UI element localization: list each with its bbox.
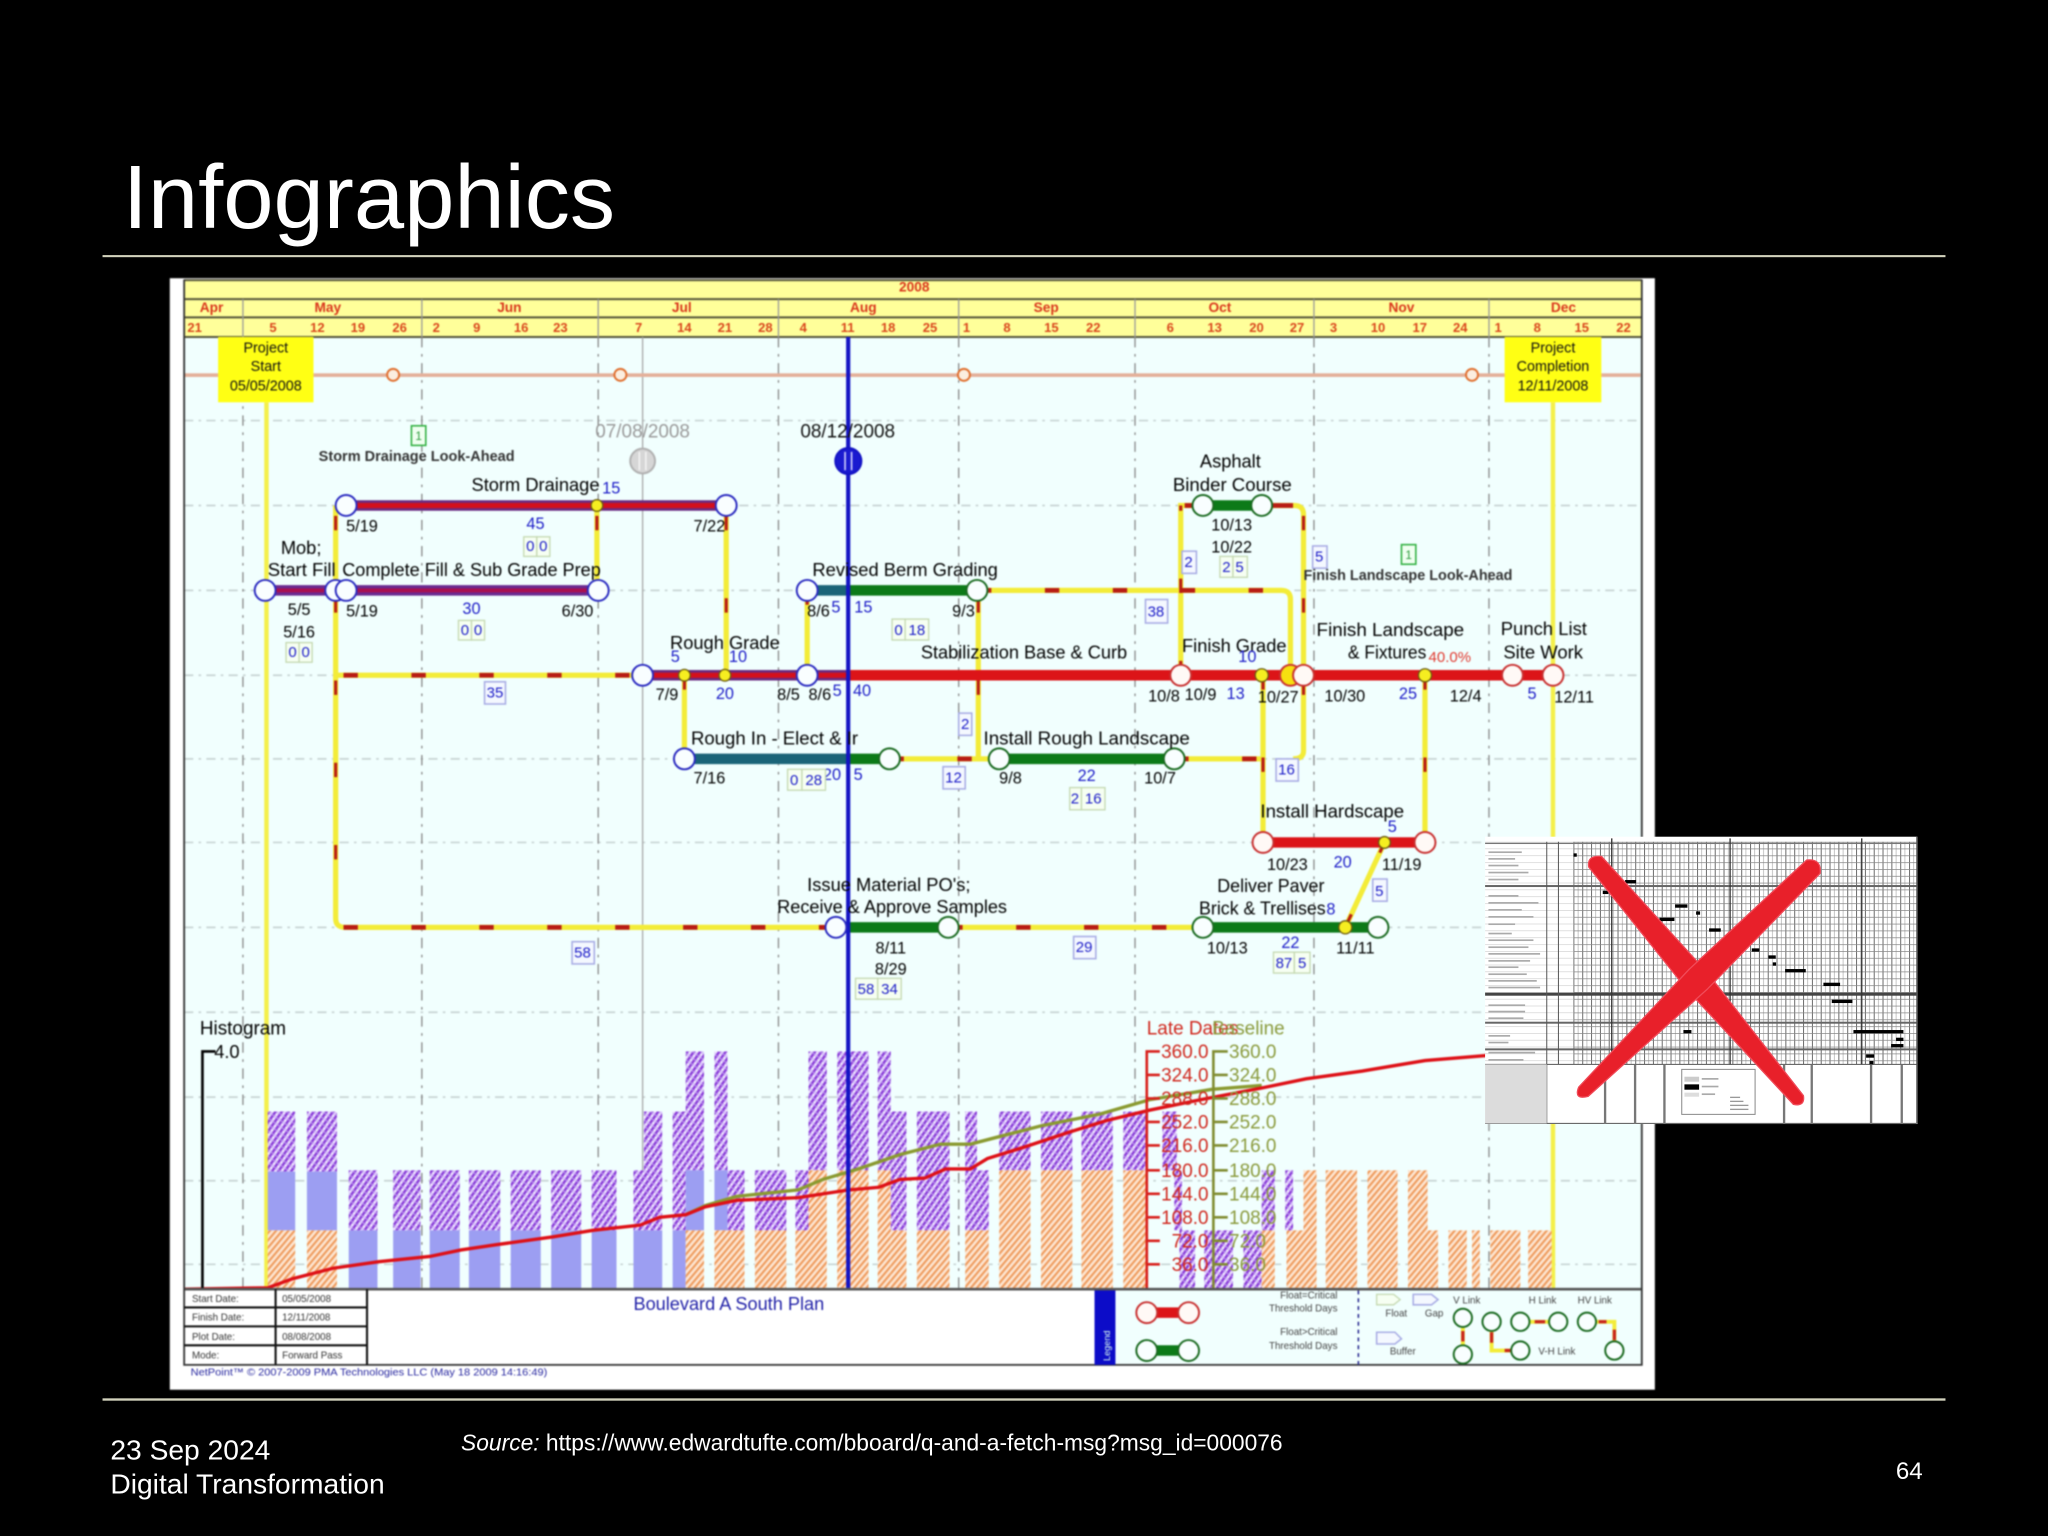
activity durations: 25 xyxy=(1399,685,1417,703)
float boxes: 34 xyxy=(881,981,898,998)
timeline header: 19 xyxy=(351,320,365,335)
activity durations: 20 xyxy=(716,685,734,703)
legend: critical and non-critical bars: Threshold Days xyxy=(1269,1341,1338,1352)
activity durations: 20 xyxy=(1334,853,1352,871)
S-curve: late dates xyxy=(184,1055,1489,1289)
activity labels: Start Fill xyxy=(268,559,336,580)
project info table xyxy=(184,1289,367,1365)
project info table: Forward Pass xyxy=(282,1350,343,1361)
activity dates: 10/30 xyxy=(1324,687,1365,705)
activity dates: 7/9 xyxy=(656,686,678,704)
gantt footer and legend xyxy=(1485,1064,1902,1123)
activity durations: 5 xyxy=(671,648,680,666)
float boxes: 0 xyxy=(894,622,903,639)
timeline header: 21 xyxy=(187,320,202,335)
float boxes: 0 xyxy=(461,622,469,639)
project info table: 08/08/2008 xyxy=(282,1332,332,1343)
baseline axis: 144.0 xyxy=(1229,1184,1276,1205)
activity labels: Storm Drainage Look-Ahead xyxy=(319,449,515,465)
source citation: Source: https://www.edwardtufte.com/bboard/q-and-a-fetch-msg?msg_id=000076 xyxy=(461,1429,1283,1455)
data date markers xyxy=(595,422,895,474)
activity durations: 45 xyxy=(526,515,545,533)
activity labels: Stabilization Base & Curb xyxy=(921,641,1127,662)
activity labels: Binder Course xyxy=(1173,474,1292,495)
activity labels: Rough Grade xyxy=(670,632,780,653)
legend: critical and non-critical bars: Float>Critical xyxy=(1280,1327,1337,1338)
late dates axis: 144.0 xyxy=(1161,1184,1209,1205)
activity labels: & Fixtures xyxy=(1348,641,1426,662)
late dates axis: 288.0 xyxy=(1161,1089,1209,1110)
project info table: Finish Date: xyxy=(192,1312,244,1323)
timeline header: 16 xyxy=(514,320,528,335)
timeline header: 15 xyxy=(1044,320,1059,335)
legend: float, gap and buffer: Float xyxy=(1385,1309,1407,1320)
activity dates: 5/19 xyxy=(346,602,378,620)
legend: critical and non-critical bars: Float=Critical xyxy=(1280,1290,1337,1301)
timeline header: 2008 xyxy=(899,279,930,294)
activity dates: 8/5 xyxy=(777,686,800,704)
late dates axis: 360.0 xyxy=(1161,1042,1209,1063)
float boxes: 58 xyxy=(858,981,874,998)
legend: link types xyxy=(1453,1296,1624,1364)
activity dates: 9/3 xyxy=(952,602,975,620)
activity durations: 13 xyxy=(1227,685,1245,703)
legend tab xyxy=(1095,1290,1115,1365)
activity dates xyxy=(283,516,1594,978)
legend: critical and non-critical bars: Threshold Days xyxy=(1269,1303,1338,1314)
activity dates: 7/22 xyxy=(694,518,725,536)
timeline header: 1 xyxy=(963,320,970,335)
legend: critical and non-critical bars xyxy=(1136,1290,1358,1365)
gap boxes: 2 xyxy=(961,716,969,733)
late dates axis: 180.0 xyxy=(1161,1161,1209,1182)
data date markers: 08/12/2008 xyxy=(800,422,895,443)
baseline axis: 108.0 xyxy=(1229,1208,1276,1229)
timeline header: 15 xyxy=(1574,320,1589,335)
activity dates: 10/23 xyxy=(1267,856,1308,874)
timeline header: Aug xyxy=(850,300,877,315)
activity dates: 10/9 xyxy=(1185,686,1216,704)
activity labels: Finish Landscape Look-Ahead xyxy=(1304,568,1512,584)
late dates axis: 72.0 xyxy=(1172,1231,1208,1252)
copyright line: NetPoint™ © 2007-2009 PMA Technologies LLC (May 18 2009 14:16:49) xyxy=(191,1367,547,1378)
timeline header: Jun xyxy=(497,300,522,315)
float boxes: 28 xyxy=(805,772,822,789)
timeline header: 18 xyxy=(881,320,895,335)
activity dates: 10/22 xyxy=(1211,538,1252,556)
activity dates: 5/5 xyxy=(288,601,310,619)
float boxes: 0 xyxy=(790,772,798,789)
activity labels: Deliver Paver xyxy=(1217,875,1324,896)
timeline header: 28 xyxy=(758,320,773,335)
float boxes: 0 xyxy=(526,538,534,555)
gap boxes: 58 xyxy=(574,944,591,961)
timeline header: 2 xyxy=(433,320,440,335)
baseline axis xyxy=(1212,1018,1285,1289)
float boxes: 2 xyxy=(1222,559,1231,576)
timeline header: Jul xyxy=(672,300,692,315)
baseline axis: 252.0 xyxy=(1229,1112,1276,1133)
gap boxes: 2 xyxy=(1184,554,1193,571)
activity durations: 5 xyxy=(854,766,863,784)
timeline header xyxy=(184,279,1642,337)
page number: 64 xyxy=(1896,1458,1923,1485)
timeline header: 22 xyxy=(1616,320,1631,335)
footer date and course xyxy=(110,1434,385,1500)
look-ahead flags: 1 xyxy=(1405,549,1412,562)
timeline header: 7 xyxy=(635,320,642,335)
activity dates: 7/16 xyxy=(694,770,725,788)
activity labels: Finish Grade xyxy=(1182,635,1287,656)
timeline header: 9 xyxy=(473,320,480,335)
look-ahead flags xyxy=(411,426,1416,564)
timeline header: 8 xyxy=(1534,320,1541,335)
activity labels: Issue Material PO's; xyxy=(807,874,970,895)
timeline header: 1 xyxy=(1494,320,1502,335)
activity durations: 40 xyxy=(853,682,871,700)
red X xyxy=(1577,856,1820,1105)
activity durations xyxy=(462,480,1537,952)
float boxes: 5 xyxy=(1298,955,1306,972)
activity dates: 8/6 xyxy=(807,602,830,620)
activity dates: 8/11 xyxy=(876,939,906,957)
activity durations: 15 xyxy=(854,599,872,617)
timeline header: Oct xyxy=(1208,300,1232,315)
timeline header: 10 xyxy=(1371,320,1385,335)
histogram axis: Histogram xyxy=(200,1018,286,1039)
project info table: Mode: xyxy=(192,1350,219,1361)
late dates axis: 216.0 xyxy=(1161,1136,1209,1157)
milestone: project start: 05/05/2008 xyxy=(230,379,302,395)
float boxes: 0 xyxy=(539,538,548,555)
baseline axis: 36.0 xyxy=(1229,1255,1266,1276)
activity labels: Receive & Approve Samples xyxy=(777,896,1007,917)
timeline header: 5 xyxy=(269,320,277,335)
project info table: 12/11/2008 xyxy=(282,1312,331,1323)
legend: link types: HV Link xyxy=(1578,1296,1612,1307)
activity dates: 11/11 xyxy=(1336,939,1375,957)
project info table: Start Date: xyxy=(192,1294,239,1305)
timeline header: 23 xyxy=(553,320,568,335)
calendar milestone line xyxy=(184,369,1640,381)
gantt task column xyxy=(1488,851,1540,1061)
project name: Boulevard A South Plan xyxy=(633,1293,824,1314)
late dates axis xyxy=(1147,1018,1238,1289)
timeline header: 6 xyxy=(1167,320,1174,335)
activity labels: Rough In - Elect & Ir xyxy=(691,727,858,748)
legend: float, gap and buffer: Gap xyxy=(1425,1309,1444,1320)
activity dates: 12/4 xyxy=(1450,687,1482,705)
timeline header: 20 xyxy=(1249,320,1264,335)
activity bars xyxy=(265,505,1553,927)
milestone: project start xyxy=(218,337,313,402)
activity durations: 5 xyxy=(1528,685,1537,703)
activity dates: 5/16 xyxy=(283,623,315,641)
gap boxes: 29 xyxy=(1076,939,1092,956)
timeline header: Nov xyxy=(1389,300,1415,315)
gantt task bars xyxy=(1573,853,1903,1064)
activity durations: 5 xyxy=(831,599,840,617)
activity dates: 11/19 xyxy=(1382,856,1422,874)
activity labels: Asphalt xyxy=(1200,451,1261,472)
S-curve: baseline xyxy=(686,1085,1262,1215)
timeline header: 24 xyxy=(1453,320,1468,335)
float boxes xyxy=(286,537,1310,999)
baseline axis: 180.0 xyxy=(1229,1161,1276,1182)
milestone: project completion: 12/11/2008 xyxy=(1518,379,1588,395)
footer date and course: 23 Sep 2024 xyxy=(110,1434,270,1466)
gap boxes: 35 xyxy=(487,684,503,701)
gap boxes: 38 xyxy=(1148,603,1164,620)
late dates axis: 108.0 xyxy=(1161,1208,1209,1229)
activity labels: Storm Drainage xyxy=(472,474,600,495)
activity labels: Site Work xyxy=(1503,641,1584,662)
timeline header: May xyxy=(315,300,342,315)
timeline header: Sep xyxy=(1034,300,1059,315)
project info table: Plot Date: xyxy=(192,1332,235,1343)
milestone: project completion: Project xyxy=(1531,341,1575,357)
gantt grid xyxy=(1485,837,1917,1123)
timeline header: 21 xyxy=(718,320,732,335)
activity dates: 10/13 xyxy=(1207,939,1248,957)
gap boxes: 5 xyxy=(1315,549,1323,566)
float boxes: 5 xyxy=(1235,559,1244,576)
timeline header: 14 xyxy=(677,320,692,335)
baseline axis: 72.0 xyxy=(1229,1231,1266,1252)
title block xyxy=(184,280,1642,1365)
activity dates: 10/13 xyxy=(1211,516,1252,534)
legend: link types: V Link xyxy=(1453,1296,1480,1307)
timeline header: 27 xyxy=(1290,320,1304,335)
float boxes: 16 xyxy=(1085,790,1102,807)
activity dates: 10/27 xyxy=(1258,689,1299,707)
gap boxes: 12 xyxy=(945,769,962,786)
late dates axis: 36.0 xyxy=(1172,1255,1208,1276)
panel: network schedule chart xyxy=(170,278,1655,1390)
milestone: project start: Project xyxy=(243,341,288,357)
activity durations: 5 xyxy=(1388,818,1397,836)
top rule xyxy=(103,255,1945,257)
activity dates: 9/8 xyxy=(999,770,1022,788)
project info table: 05/05/2008 xyxy=(282,1294,332,1305)
activity durations: 10 xyxy=(729,648,747,666)
activity labels: Brick & Trellises xyxy=(1199,897,1326,918)
activity labels xyxy=(268,449,1587,918)
activity labels: Install Hardscape xyxy=(1260,801,1404,822)
milestone: project start: Start xyxy=(251,359,281,375)
timeline header: 4 xyxy=(800,320,808,335)
overlay: crossed-out Gantt chart xyxy=(1485,837,1917,1124)
activity durations: 20 xyxy=(823,766,841,784)
activity labels: Finish Landscape xyxy=(1317,619,1464,640)
legend: float, gap and buffer: Buffer xyxy=(1390,1346,1416,1357)
histogram bars xyxy=(268,1051,1552,1289)
activity dates: 12/11 xyxy=(1554,689,1594,707)
legend tab: Legend xyxy=(1102,1331,1112,1361)
milestone: project completion xyxy=(1505,337,1601,402)
activity durations: 22 xyxy=(1281,934,1300,952)
activity labels: Install Rough Landscape xyxy=(984,727,1190,748)
timeline header: 12 xyxy=(310,320,325,335)
late dates axis: 252.0 xyxy=(1161,1112,1209,1133)
activity dates: 10/8 xyxy=(1148,687,1180,705)
timeline header: 25 xyxy=(923,320,937,335)
float boxes: 0 xyxy=(301,644,310,661)
baseline axis: 324.0 xyxy=(1229,1065,1276,1086)
float boxes: 87 xyxy=(1276,955,1292,972)
activity dates: 10/7 xyxy=(1144,770,1176,788)
histogram axis xyxy=(200,1018,286,1289)
bottom rule xyxy=(103,1398,1945,1401)
activity labels: 40.0% xyxy=(1429,649,1471,666)
look-ahead flags: 1 xyxy=(415,430,422,443)
activity durations: 5 xyxy=(833,682,842,700)
timeline header: 3 xyxy=(1330,320,1337,335)
late dates axis: 324.0 xyxy=(1161,1065,1209,1086)
timeline header: Apr xyxy=(200,300,224,315)
activity labels: Punch List xyxy=(1501,618,1587,639)
timeline header: 8 xyxy=(1003,320,1011,335)
legend: float, gap and buffer xyxy=(1377,1294,1444,1357)
float boxes: 0 xyxy=(474,622,482,639)
timeline header: 13 xyxy=(1207,320,1222,335)
activity dates: 8/29 xyxy=(875,960,907,978)
activity durations: 8 xyxy=(1326,900,1335,918)
activity dates: 5/19 xyxy=(346,518,378,536)
baseline axis: 216.0 xyxy=(1229,1136,1276,1157)
timeline header: 22 xyxy=(1086,320,1100,335)
activity labels: Complete Fill & Sub Grade Prep xyxy=(342,559,601,580)
milestone: project completion: Completion xyxy=(1517,359,1589,375)
float boxes: 0 xyxy=(288,644,297,661)
baseline axis: 288.0 xyxy=(1229,1089,1276,1110)
gap boxes xyxy=(485,546,1387,964)
activity dates: 8/6 xyxy=(808,686,831,704)
float boxes: 2 xyxy=(1071,790,1079,807)
activity durations: 22 xyxy=(1078,767,1096,785)
timeline header: Dec xyxy=(1551,300,1576,315)
activity durations: 15 xyxy=(602,480,620,498)
activity nodes xyxy=(255,495,1563,938)
today line xyxy=(846,337,850,1289)
baseline axis: 360.0 xyxy=(1229,1042,1276,1063)
baseline axis: Baseline xyxy=(1212,1018,1285,1039)
activity durations: 30 xyxy=(462,600,481,618)
data date markers: 07/08/2008 xyxy=(595,422,690,443)
dependency links xyxy=(336,505,1425,927)
activity labels: Mob; xyxy=(281,537,321,558)
histogram axis: 4.0 xyxy=(214,1041,240,1062)
timeline header: 17 xyxy=(1412,320,1427,335)
timeline header: 11 xyxy=(841,320,855,335)
timeline header: 26 xyxy=(392,320,407,335)
activity dates: 6/30 xyxy=(562,602,593,620)
footer date and course: Digital Transformation xyxy=(110,1468,385,1500)
activity labels: Revised Berm Grading xyxy=(812,559,998,580)
gap boxes: 5 xyxy=(1375,883,1383,900)
activity durations: 10 xyxy=(1238,648,1256,666)
legend: link types: H Link xyxy=(1529,1296,1556,1307)
legend: link types: V-H Link xyxy=(1538,1346,1575,1357)
title: Infographics xyxy=(123,147,615,248)
late dates axis: Late Dates xyxy=(1147,1018,1238,1039)
gap boxes: 16 xyxy=(1278,762,1295,779)
float boxes: 18 xyxy=(909,622,925,639)
